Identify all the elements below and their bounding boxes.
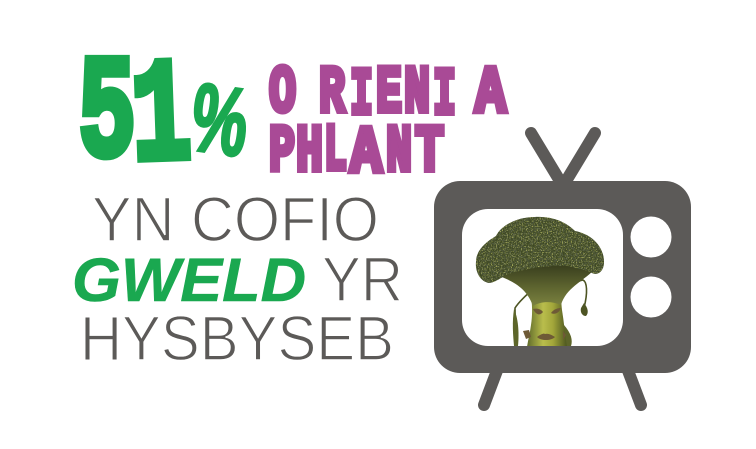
- broccoli crown: [476, 216, 604, 283]
- purple text: PHLANT: P: [269, 115, 295, 190]
- purple text: O RIENI A: A: [475, 56, 506, 131]
- statement: yn cofio gweld yr hysbyseb: YR: [322, 245, 403, 315]
- tv knob bottom: [630, 276, 672, 318]
- big green statistic 51%: 5: [78, 33, 136, 199]
- purple text: PHLANT: T: [415, 115, 444, 190]
- big green statistic 51%: [78, 33, 255, 203]
- headline: 51% o rieni a phlant: [78, 33, 506, 203]
- big green statistic 51%: 1: [128, 35, 194, 203]
- purple text: O RIENI A: R: [319, 56, 345, 131]
- purple text: O RIENI A: I: [350, 58, 373, 133]
- statement: yn cofio gweld yr hysbyseb: YN COFIO: [92, 185, 379, 255]
- broccoli stem: [527, 302, 567, 346]
- statement: yn cofio gweld yr hysbyseb: GWELD: [72, 246, 306, 314]
- broccoli face: [523, 308, 566, 340]
- purple text: O RIENI A: [269, 56, 506, 133]
- purple text: PHLANT: N: [386, 115, 412, 190]
- statement: yn cofio gweld yr hysbyseb: HYSBYSEB: [80, 304, 394, 374]
- icon: television with broccoli: [434, 133, 691, 405]
- tv body: [434, 181, 691, 373]
- statement: yn cofio gweld yr hysbyseb: [72, 185, 403, 374]
- purple text: O RIENI A: E: [376, 56, 402, 131]
- purple text: O RIENI A: N: [404, 56, 430, 131]
- purple text: PHLANT: H: [296, 115, 323, 190]
- infographic canvas: [74, 54, 691, 411]
- big green statistic 51%: %: [185, 64, 255, 177]
- stem underside: [502, 266, 592, 306]
- broccoli leaves: [513, 280, 588, 346]
- broccoli with face: [476, 216, 604, 346]
- tv antenna: [531, 133, 595, 186]
- purple text: O RIENI A: I: [433, 58, 456, 133]
- tv legs: [484, 368, 641, 405]
- purple text: O RIENI A: O: [269, 56, 296, 131]
- tv knob top: [630, 216, 672, 258]
- tv screen: [462, 209, 623, 346]
- purple text: PHLANT: [269, 114, 444, 191]
- purple text: PHLANT: A: [350, 116, 382, 191]
- purple text: PHLANT: L: [324, 114, 347, 189]
